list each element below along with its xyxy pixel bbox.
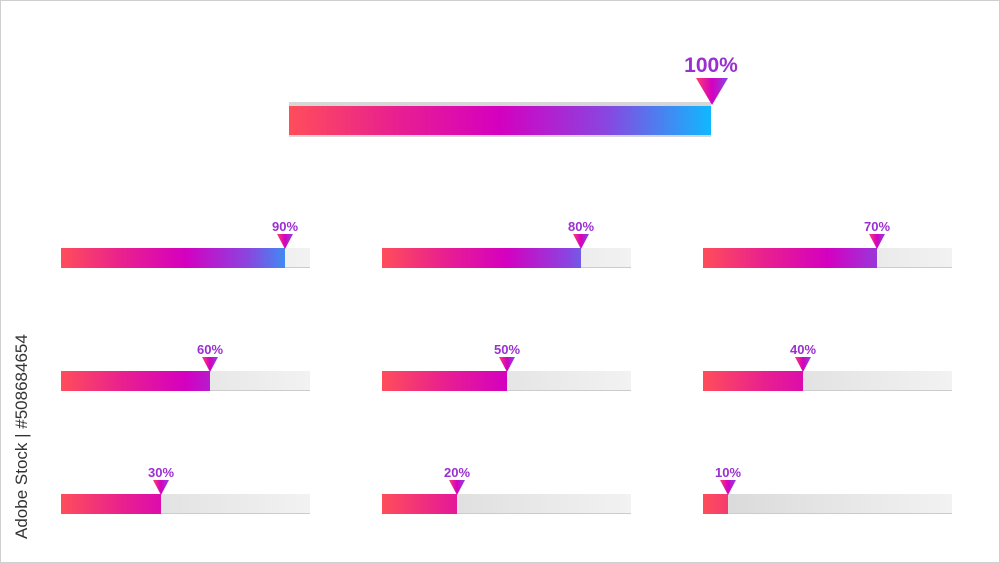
bar 40% bbox=[703, 371, 952, 391]
bar 30% bbox=[61, 494, 310, 514]
bar 70% bbox=[703, 248, 952, 268]
bar 90% bbox=[61, 248, 310, 268]
text: 60% bbox=[197, 342, 223, 357]
text: 10% bbox=[715, 465, 741, 480]
text: 90% bbox=[272, 219, 298, 234]
bar 50% bbox=[382, 371, 631, 391]
label 100%: 100% bbox=[684, 54, 738, 77]
bar 10% bbox=[703, 494, 952, 514]
main bar 100% bbox=[289, 54, 738, 137]
bar 20% bbox=[382, 494, 631, 514]
text: 20% bbox=[444, 465, 470, 480]
text: 80% bbox=[568, 219, 594, 234]
watermark text: Adobe Stock | #508684654 bbox=[12, 334, 31, 539]
bar 80% bbox=[382, 248, 631, 268]
marker triangle bbox=[696, 78, 728, 105]
text: 50% bbox=[494, 342, 520, 357]
text: 30% bbox=[148, 465, 174, 480]
text: 70% bbox=[864, 219, 890, 234]
bar 60% bbox=[61, 371, 310, 391]
text: 40% bbox=[790, 342, 816, 357]
